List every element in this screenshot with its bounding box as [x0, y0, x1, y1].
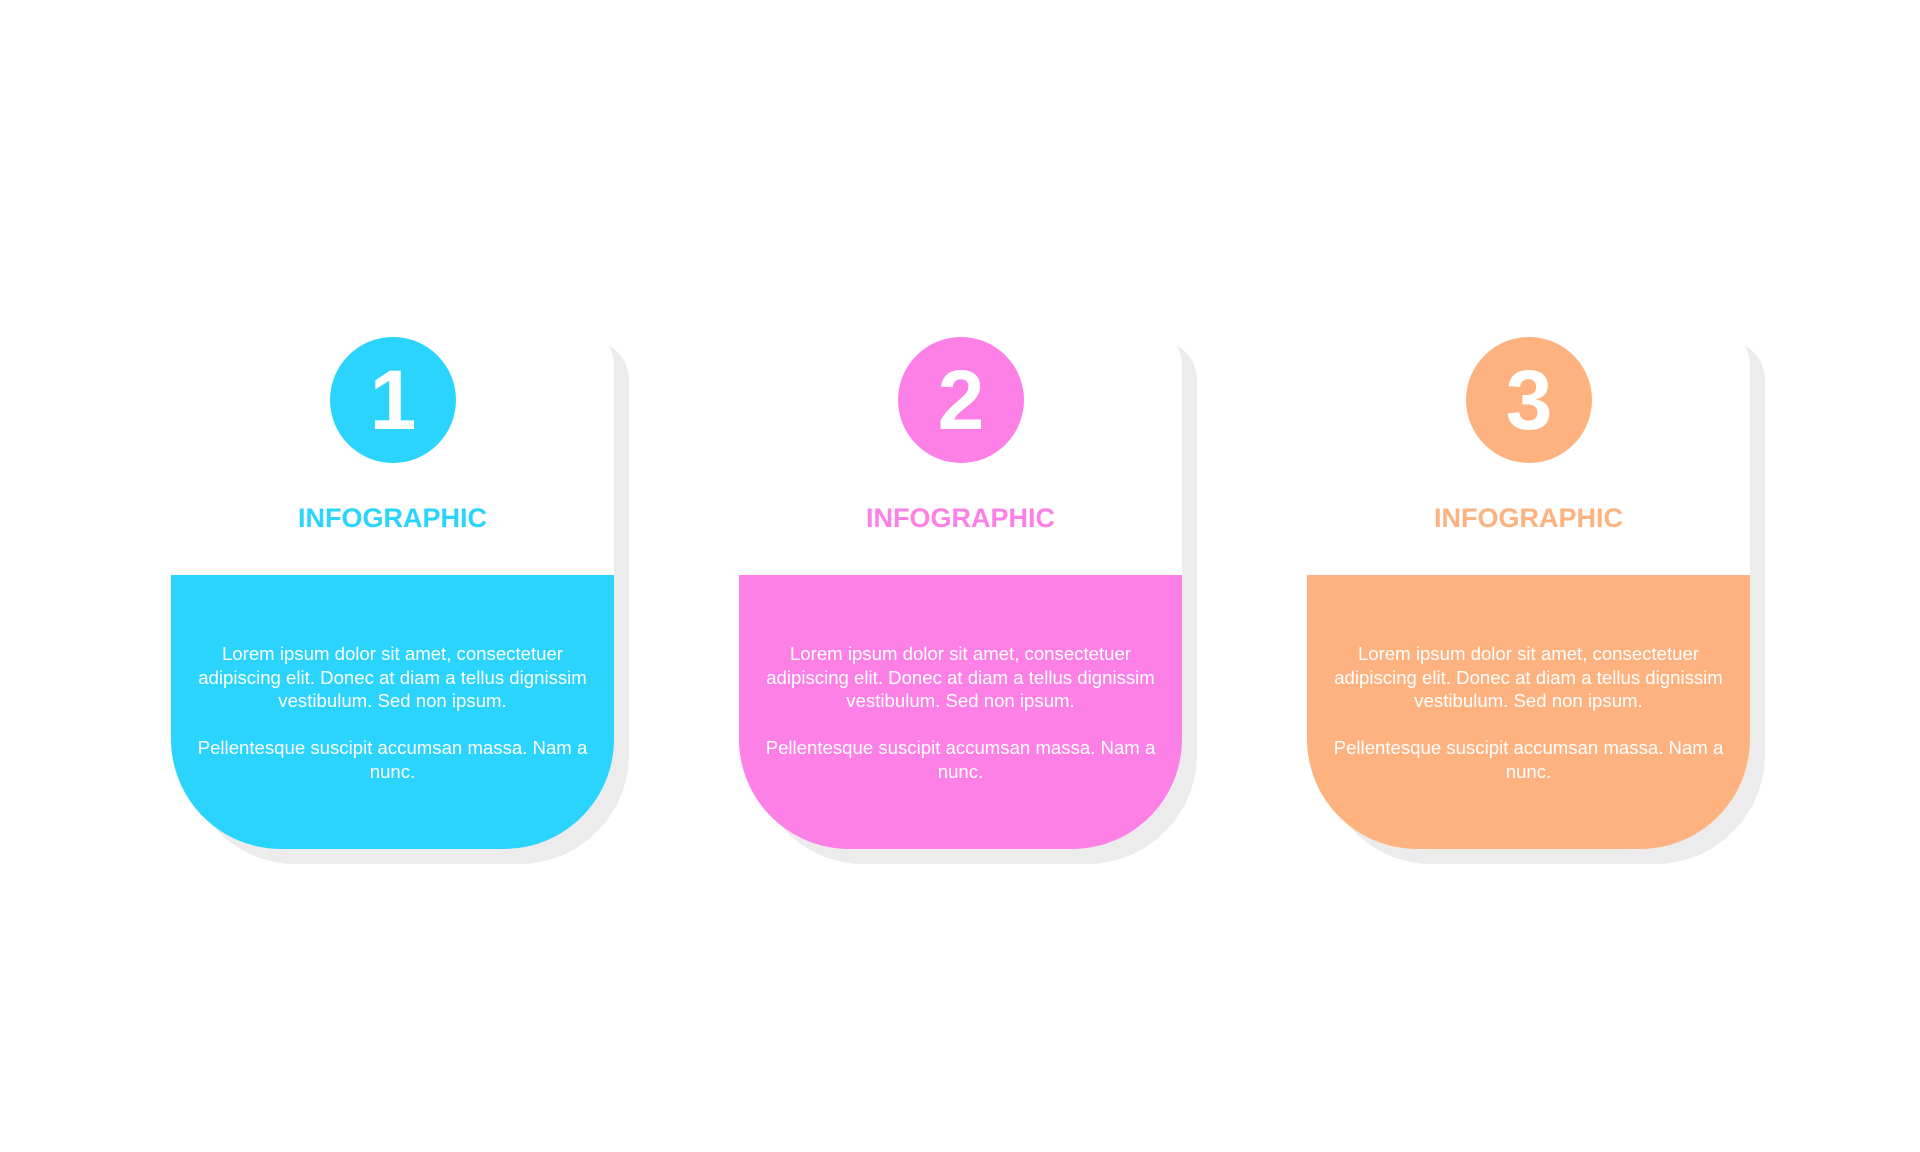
title 1: INFOGRAPHIC	[298, 503, 487, 533]
text 3	[1334, 643, 1724, 782]
text 2: Lorem ipsum dolor sit amet, consectetuer adipiscing elit. Donec at diam a tellus dignissim vestibulum. Sed non ipsum.	[766, 643, 1155, 711]
text 3: Pellentesque suscipit accumsan massa. Nam a nunc.	[1334, 737, 1723, 782]
title 3: INFOGRAPHIC	[1434, 503, 1623, 533]
icon: number 2	[898, 337, 1024, 463]
title 2: INFOGRAPHIC	[866, 503, 1055, 533]
text 1	[198, 643, 588, 782]
icon: number 3: 3	[1506, 353, 1552, 447]
band 1	[171, 575, 614, 849]
icon: number 3	[1466, 337, 1592, 463]
text 1: Pellentesque suscipit accumsan massa. Nam a nunc.	[198, 737, 587, 782]
icon: number 2: 2	[938, 353, 984, 447]
band 2	[739, 575, 1182, 849]
band 3	[1307, 575, 1750, 849]
card 1	[171, 337, 629, 864]
text 1: Lorem ipsum dolor sit amet, consectetuer adipiscing elit. Donec at diam a tellus dignissim vestibulum. Sed non ipsum.	[198, 643, 587, 711]
card 2	[739, 337, 1197, 864]
text 3: Lorem ipsum dolor sit amet, consectetuer adipiscing elit. Donec at diam a tellus dignissim vestibulum. Sed non ipsum.	[1334, 643, 1723, 711]
text 2: Pellentesque suscipit accumsan massa. Nam a nunc.	[766, 737, 1155, 782]
icon: number 1: 1	[370, 353, 416, 447]
icon: number 1	[330, 337, 456, 463]
card 3	[1307, 337, 1765, 864]
text 2	[766, 643, 1156, 782]
